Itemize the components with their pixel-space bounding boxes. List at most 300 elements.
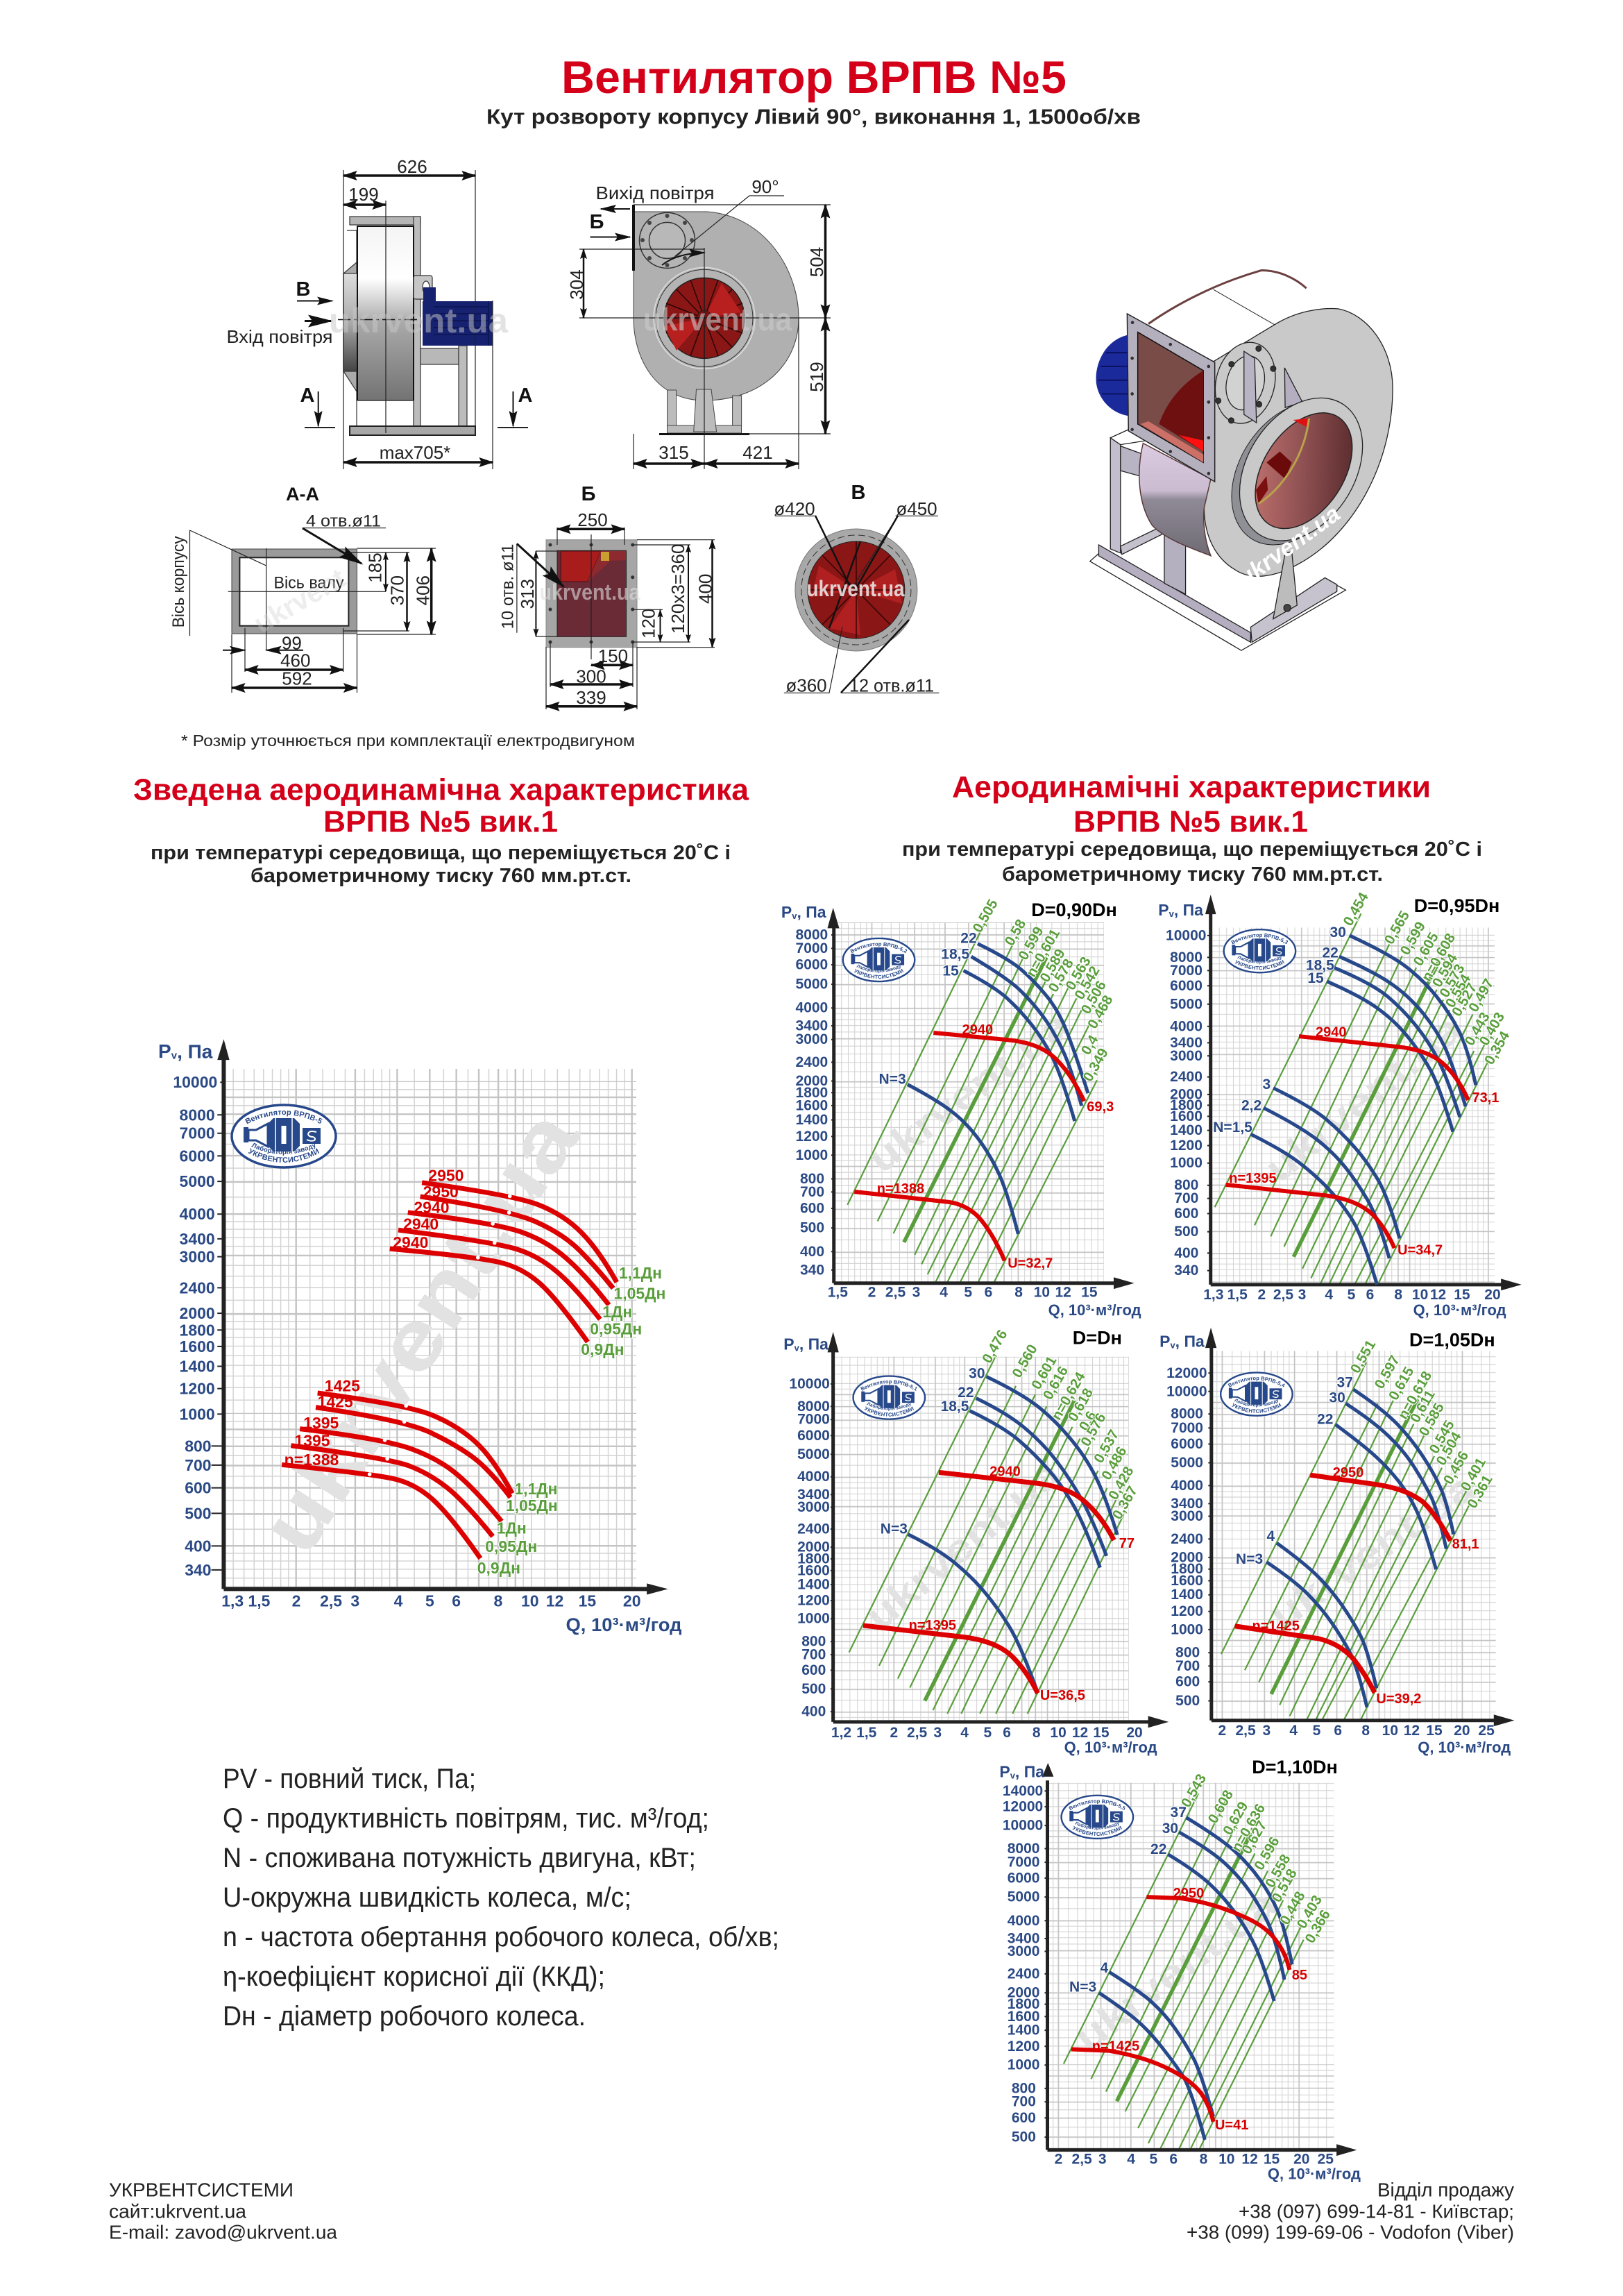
x axis labels: 12 xyxy=(546,1592,563,1610)
footer: sales contacts xyxy=(1187,2179,1514,2243)
dimensions front view: 304 xyxy=(566,269,587,300)
logo: Лабораторія заводу xyxy=(251,1142,315,1156)
axis titles and chart title: D=0,90Dн xyxy=(1031,900,1117,920)
drawing: section A-A: 370 xyxy=(387,575,408,605)
power and speed labels: 2940 xyxy=(1316,1025,1346,1040)
power and speed labels: N=3 xyxy=(879,1071,906,1087)
power and speed labels: U=39,2 xyxy=(1376,1691,1421,1707)
y axis labels: 340 xyxy=(185,1561,212,1579)
x axis labels: 2 xyxy=(890,1725,898,1741)
efficiency labels: 0,545 xyxy=(1426,1417,1458,1456)
power and speed labels: 37 xyxy=(1337,1375,1353,1391)
curves xyxy=(282,1183,617,1558)
x axis labels: 1,5 xyxy=(1227,1287,1248,1303)
efficiency labels: 0,476 xyxy=(979,1327,1011,1366)
dimensions front view: Вихід повітря xyxy=(595,183,715,203)
drawing: section B flange: Б xyxy=(581,483,595,505)
motor xyxy=(1096,335,1128,416)
y axis labels: 1800 xyxy=(1170,1097,1203,1113)
y axis labels: 3400 xyxy=(1171,1496,1203,1512)
x axis labels: 2,5 xyxy=(885,1285,906,1301)
logo: Вентилятор ВРПВ-5,1 xyxy=(860,1380,917,1391)
heading: characteristics xyxy=(902,770,1482,886)
y axis labels: 5000 xyxy=(1171,1455,1203,1471)
y axis labels: 4000 xyxy=(797,1469,830,1485)
chart: D=1,10Dн xyxy=(999,1757,1361,2183)
support bracket xyxy=(1273,552,1297,619)
x axis labels: 5 xyxy=(1313,1723,1321,1739)
peak efficiency line xyxy=(904,957,1046,1242)
y axis labels xyxy=(796,927,828,1278)
drawing: section A-A: 406 xyxy=(412,575,433,605)
diameter labels: 1,1Дн xyxy=(514,1480,558,1498)
y axis labels: 4000 xyxy=(796,1000,828,1016)
y axis labels: 10000 xyxy=(173,1073,217,1091)
efficiency lines xyxy=(1215,913,1488,1285)
dimensions side view: 626 xyxy=(397,156,427,177)
efficiency labels: 0,361 xyxy=(1464,1472,1496,1511)
x axis labels: 4 xyxy=(1289,1723,1298,1739)
chart: D=Dн xyxy=(783,1327,1169,1756)
dimensions front view: 315 xyxy=(658,442,689,463)
x axis labels: 2 xyxy=(1055,2152,1062,2168)
logo: Лабораторія заводу xyxy=(1234,1399,1278,1408)
x axis labels xyxy=(828,1285,1098,1301)
axis titles and chart title: D=Dн xyxy=(1073,1327,1122,1348)
legend: symbols xyxy=(223,1764,779,2032)
motor xyxy=(423,287,493,346)
footer: company contacts: УКРВЕНТСИСТЕМИ xyxy=(109,2179,294,2200)
x axis labels: 20 xyxy=(1484,1287,1501,1303)
logo: УКРВЕНТСИСТЕМИ xyxy=(1232,1403,1281,1413)
grid xyxy=(1211,927,1495,1285)
efficiency labels: 0,560 xyxy=(1009,1342,1041,1381)
efficiency labels: 0,403 xyxy=(1293,1893,1325,1932)
axis titles and chart title: D=1,05Dн xyxy=(1409,1329,1495,1350)
x axis labels: 3 xyxy=(350,1592,359,1610)
x axis labels: 12 xyxy=(1430,1287,1446,1303)
efficiency lines xyxy=(1064,1793,1304,2149)
x axis labels: 2,5 xyxy=(1072,2152,1092,2168)
y axis labels: 8000 xyxy=(180,1106,215,1124)
power and speed labels: U=36,5 xyxy=(1040,1688,1085,1703)
diameter labels: 1,05Дн xyxy=(506,1496,558,1514)
y axis labels: 1600 xyxy=(1170,1108,1203,1124)
power and speed labels: U=41 xyxy=(1215,2118,1248,2133)
y axis labels: 3000 xyxy=(180,1248,215,1266)
y axis labels: 600 xyxy=(801,1662,826,1678)
axis titles and chart title: P xyxy=(781,903,792,921)
x axis labels: 10 xyxy=(1412,1287,1428,1303)
x axis labels: 20 xyxy=(1126,1725,1143,1741)
axis titles and chart title: , Па xyxy=(1174,901,1203,919)
power and speed labels: n=1395 xyxy=(909,1618,956,1633)
axis titles: P xyxy=(999,1763,1010,1781)
watermark: ukrvent.ua xyxy=(241,1092,597,1569)
y axis labels: 2000 xyxy=(797,1539,830,1555)
axis titles and chart title xyxy=(783,1327,1157,1756)
power curves xyxy=(1266,1390,1454,1707)
y axis labels: 600 xyxy=(1175,1674,1200,1690)
y axis labels: 8000 xyxy=(797,1399,830,1415)
drawing: section B flange: 120х3=360 xyxy=(668,544,688,634)
y axis labels: 8000 xyxy=(796,927,828,943)
y axis labels: 1800 xyxy=(1008,1996,1039,2012)
frame xyxy=(232,549,357,634)
y axis labels: 10000 xyxy=(1166,1383,1207,1399)
y axis labels xyxy=(789,1376,830,1720)
efficiency labels: 0,615 xyxy=(1386,1364,1417,1403)
diameter labels: 0,95Дн xyxy=(485,1537,537,1555)
speed labels: 1395 xyxy=(294,1431,330,1449)
grid xyxy=(834,922,1104,1283)
efficiency labels xyxy=(1178,1771,1334,1946)
efficiency labels: 0,58 xyxy=(1001,917,1029,949)
y axis labels: 500 xyxy=(801,1681,826,1697)
y axis labels: 500 xyxy=(185,1504,212,1522)
y axis labels: 12000 xyxy=(1003,1799,1043,1815)
heading: summary characteristic: ВРПВ №5 вик.1 xyxy=(323,805,558,838)
y axis labels: 1400 xyxy=(796,1112,828,1128)
y axis labels: 5000 xyxy=(797,1446,830,1462)
x axis labels: 5 xyxy=(964,1285,972,1301)
logo: Лабораторія заводу xyxy=(867,1402,910,1411)
speed labels: 2950 xyxy=(423,1183,459,1201)
efficiency labels: 0,558 xyxy=(1262,1852,1294,1891)
efficiency labels xyxy=(979,1327,1141,1522)
lower scroll xyxy=(1139,444,1211,556)
axes xyxy=(1205,895,1522,1290)
drawing: section A-A: А-А xyxy=(286,484,319,505)
y axis labels: 800 xyxy=(1175,1645,1200,1661)
axis titles: v xyxy=(1010,1770,1016,1780)
watermark: ukrvent.ua xyxy=(857,1451,1070,1639)
speed curves xyxy=(854,1033,1084,1260)
efficiency labels: n=0,601 xyxy=(1023,927,1063,980)
legend: symbols: Dн - діаметр робочого колеса. xyxy=(223,2001,586,2032)
speed labels: 2950 xyxy=(428,1167,464,1185)
power and speed labels: 15 xyxy=(1307,970,1324,986)
power and speed labels: N=3 xyxy=(1069,1980,1096,1995)
power and speed labels: N=1,5 xyxy=(1213,1120,1252,1136)
y axis labels: 500 xyxy=(1175,1693,1200,1709)
grid xyxy=(1048,1783,1334,2150)
logo: Вентилятор ВРПВ-5,2 xyxy=(850,943,908,954)
efficiency labels xyxy=(1340,890,1513,1067)
best efficiency points xyxy=(368,1195,511,1476)
efficiency labels: 0,599 xyxy=(1397,919,1429,958)
power and speed labels: 2940 xyxy=(989,1464,1021,1480)
footer: sales contacts: Відділ продажу xyxy=(1377,2179,1514,2200)
x axis labels: 1,5 xyxy=(856,1725,877,1741)
y axis labels: 800 xyxy=(801,1634,826,1650)
y axis labels: 2400 xyxy=(180,1278,215,1297)
power and speed labels: 2,2 xyxy=(1241,1098,1261,1114)
axes xyxy=(827,908,1135,1289)
power and speed labels: 81,1 xyxy=(1452,1537,1479,1552)
x axis labels: 2,5 xyxy=(1235,1723,1256,1739)
y axis labels: 800 xyxy=(800,1171,824,1187)
dimensions front view xyxy=(566,176,831,469)
x axis labels: 12 xyxy=(1072,1725,1088,1741)
y axis labels xyxy=(1166,927,1206,1278)
x axis labels: 1,5 xyxy=(828,1285,848,1301)
diameter labels xyxy=(477,1264,665,1577)
power and speed labels: 18,5 xyxy=(1306,957,1334,973)
logo xyxy=(842,937,916,983)
x axis labels xyxy=(1055,2152,1334,2168)
power and speed labels: 18,5 xyxy=(941,1399,969,1415)
y axis labels: 400 xyxy=(801,1704,826,1720)
chart: D=1,05Dн xyxy=(1159,1327,1514,1756)
dimensions front view: 504 xyxy=(806,247,827,277)
y axis labels: 700 xyxy=(1012,2094,1036,2110)
efficiency labels: 0,454 xyxy=(1340,890,1372,929)
x axis labels: 2,5 xyxy=(907,1725,928,1741)
x axis labels: 20 xyxy=(1293,2152,1309,2168)
efficiency labels: 0,468 xyxy=(1085,993,1116,1031)
drawing: section B flange: 150 xyxy=(598,645,628,666)
y axis labels: 600 xyxy=(800,1200,824,1216)
power and speed labels: 2950 xyxy=(1173,1886,1204,1901)
power and speed labels: 30 xyxy=(1330,925,1346,940)
efficiency labels: n=0,636 xyxy=(1228,1801,1268,1855)
x axis labels: 12 xyxy=(1404,1723,1420,1739)
y axis labels xyxy=(1166,1365,1207,1709)
x axis labels: 3 xyxy=(912,1285,920,1301)
logo: Вентилятор ВРПВ-5,5 xyxy=(1069,1799,1125,1810)
flange and body of side view xyxy=(343,217,475,435)
x axis labels: 5 xyxy=(1348,1287,1356,1303)
peak efficiency line xyxy=(1293,961,1439,1257)
power and speed labels: 3 xyxy=(1263,1077,1271,1092)
logo: УКРВЕНТСИСТЕМИ xyxy=(1073,1825,1122,1837)
efficiency labels: 0,589 xyxy=(1037,946,1069,985)
axis titles and chart title: P xyxy=(1159,1332,1170,1350)
axis titles and chart title: v xyxy=(1170,1340,1175,1350)
y axis labels: 1400 xyxy=(1170,1122,1203,1138)
x axis labels: 8 xyxy=(1394,1287,1402,1303)
y axis labels: 1000 xyxy=(1171,1621,1203,1637)
x axis labels: 15 xyxy=(1454,1287,1470,1303)
efficiency labels: 0,599 xyxy=(1015,924,1047,963)
y axis labels: 1600 xyxy=(796,1097,828,1113)
y axis labels: 3400 xyxy=(180,1230,215,1248)
axis titles: Q, 10³·м³/год xyxy=(566,1614,681,1635)
y axis labels: 2400 xyxy=(796,1054,828,1070)
efficiency labels: 0,6 xyxy=(1076,1408,1100,1433)
logo: Лабораторія заводу xyxy=(856,965,901,973)
power and speed labels: n=1395 xyxy=(1229,1171,1277,1186)
drawing: view B inlet xyxy=(774,482,939,696)
power and speed labels: 77 xyxy=(1119,1536,1135,1551)
diameter labels: 1Дн xyxy=(497,1519,527,1537)
y axis labels: 1800 xyxy=(797,1551,830,1567)
efficiency labels: 0,601 xyxy=(1028,1353,1060,1392)
y axis labels: 2400 xyxy=(1170,1069,1203,1085)
axis titles and chart title: v xyxy=(1169,908,1175,918)
efficiency labels: 0,367 xyxy=(1110,1483,1141,1522)
dimensions front view: 421 xyxy=(742,442,773,463)
y axis labels: 1200 xyxy=(1171,1603,1203,1619)
drawing: section B flange: 10 отв. ø11 xyxy=(498,544,517,629)
y axis labels: 2000 xyxy=(1008,1985,1039,2001)
x axis labels: 6 xyxy=(1169,2152,1178,2168)
top sheet xyxy=(1148,271,1339,362)
y axis labels: 1400 xyxy=(797,1577,830,1593)
outlet flange xyxy=(640,212,695,268)
chart: D=0,90Dн xyxy=(781,897,1141,1319)
diameter labels: 0,9Дн xyxy=(477,1559,520,1577)
drawing: view B inlet: В xyxy=(851,482,865,504)
y axis labels: 7000 xyxy=(797,1412,830,1428)
axis titles and chart title: D=0,95Dн xyxy=(1414,895,1499,916)
y axis labels: 1000 xyxy=(180,1405,215,1423)
speed curves xyxy=(863,1472,1114,1694)
legend: symbols: PV - повний тиск, Па; xyxy=(223,1764,476,1794)
logo: Лабораторія заводу xyxy=(1075,1821,1119,1831)
logo xyxy=(852,1375,926,1420)
power and speed labels xyxy=(881,1366,1135,1703)
efficiency labels: 0,576 xyxy=(1078,1410,1110,1449)
x axis labels: 4 xyxy=(940,1285,948,1301)
y axis labels: 600 xyxy=(1012,2110,1036,2126)
logo xyxy=(230,1104,337,1169)
y axis labels: 600 xyxy=(185,1479,212,1497)
drawing: section A-A: 185 xyxy=(365,552,386,583)
y axis labels: 2000 xyxy=(1170,1086,1203,1102)
efficiency labels: 0,366 xyxy=(1302,1907,1334,1946)
y axis labels: 1400 xyxy=(1008,2023,1039,2038)
power and speed labels xyxy=(877,931,1114,1272)
drawing: section A-A xyxy=(169,484,436,693)
y axis labels: 3000 xyxy=(1171,1508,1203,1524)
y axis labels: 1200 xyxy=(797,1593,830,1609)
power and speed labels: n=1425 xyxy=(1092,2038,1139,2054)
subtitle: Кут розвороту корпусу Лівий 90°, виконання 1, 1500об/хв xyxy=(486,104,1141,129)
watermark: side view: ukrvent.ua xyxy=(329,301,509,340)
diameter labels: 0,95Дн xyxy=(590,1320,642,1338)
x axis labels: 15 xyxy=(1081,1285,1098,1301)
y axis labels: 6000 xyxy=(1171,1436,1203,1452)
diameter labels: 0,9Дн xyxy=(581,1340,624,1358)
y axis labels: 700 xyxy=(185,1456,212,1474)
power and speed labels: 2950 xyxy=(1333,1465,1363,1480)
dimensions side view: А xyxy=(518,385,533,407)
drawing: section A-A: 592 xyxy=(282,668,312,689)
y axis labels: 700 xyxy=(800,1184,824,1200)
peak efficiency line xyxy=(1271,1399,1418,1694)
efficiency labels: 0,349 xyxy=(1080,1045,1112,1084)
y axis labels: 5000 xyxy=(796,977,828,993)
housing xyxy=(1204,309,1393,576)
x axis labels: 20 xyxy=(1454,1723,1470,1739)
axis titles and chart title xyxy=(781,900,1141,1319)
axes xyxy=(828,1332,1169,1728)
footnote: * Розмір уточнюється при комплектації електродвигуном xyxy=(181,732,635,750)
y axis labels: 6000 xyxy=(1008,1870,1039,1886)
axis titles: , Па xyxy=(177,1040,213,1062)
housing xyxy=(634,212,799,400)
efficiency labels: 0,505 xyxy=(969,897,1001,936)
power and speed labels: 22 xyxy=(1317,1411,1333,1427)
axis titles xyxy=(158,1040,681,1635)
power and speed labels: 30 xyxy=(1329,1390,1345,1406)
drawing: view B inlet: 12 отв.ø11 xyxy=(849,675,934,696)
y axis labels: 3000 xyxy=(796,1031,828,1047)
axis titles: v xyxy=(171,1049,178,1061)
y axis labels: 700 xyxy=(1175,1658,1200,1674)
efficiency labels: n=0,618 xyxy=(1395,1369,1435,1422)
diameter labels: 1,05Дн xyxy=(613,1284,665,1302)
legend: symbols: η-коефіцієнт корисної дії (ККД); xyxy=(223,1961,605,1992)
efficiency labels xyxy=(969,897,1116,1084)
power and speed labels: 22 xyxy=(1150,1841,1166,1857)
x axis labels: 10 xyxy=(1382,1723,1398,1739)
power and speed labels xyxy=(1069,1805,1307,2133)
y axis labels: 4000 xyxy=(180,1205,215,1223)
watermark: ukrvent.ua xyxy=(1256,1006,1471,1192)
power and speed labels: 22 xyxy=(958,1385,974,1401)
efficiency labels: 0,486 xyxy=(1098,1444,1130,1483)
y axis labels: 800 xyxy=(1174,1177,1198,1193)
power and speed labels: 4 xyxy=(1266,1528,1275,1544)
y axis labels: 600 xyxy=(1174,1206,1198,1222)
y axis labels: 3400 xyxy=(1170,1035,1203,1051)
x axis labels: 10 xyxy=(521,1592,539,1610)
axis titles: Q, 10³·м³/год xyxy=(1268,2166,1361,2183)
y axis labels: 1000 xyxy=(796,1147,828,1163)
dimensions front view: Б xyxy=(590,211,604,233)
efficiency labels: 0,497 xyxy=(1465,976,1497,1015)
dimensions side view xyxy=(226,156,533,469)
axis titles and chart title xyxy=(1159,1329,1511,1756)
efficiency labels: 0,554 xyxy=(1443,971,1474,1011)
outlet flange xyxy=(1127,314,1215,482)
y axis labels: 6000 xyxy=(180,1147,215,1165)
footer: sales contacts: +38 (097) 699-14-81 - Київстар; xyxy=(1239,2200,1514,2222)
y axis labels: 3400 xyxy=(796,1018,828,1033)
y axis labels: 1200 xyxy=(1170,1138,1203,1154)
efficiency labels: 0,448 xyxy=(1277,1889,1309,1927)
y axis labels: 4000 xyxy=(1171,1478,1203,1494)
heading: characteristics: при температурі середовища, що переміщується 20˚С і xyxy=(902,838,1482,861)
dimensions front view: 90° xyxy=(751,176,779,197)
axes xyxy=(1205,1328,1514,1726)
y axis labels: 1800 xyxy=(796,1085,828,1101)
logo: Вентилятор ВРПВ-5,4 xyxy=(1228,1376,1285,1387)
y axis labels: 3400 xyxy=(1008,1930,1039,1946)
efficiency labels: 0,627 xyxy=(1239,1818,1271,1857)
drawing: view B inlet: ø420 xyxy=(774,498,815,519)
chart title: D=1,10Dн xyxy=(1252,1757,1338,1778)
power curves xyxy=(908,1376,1117,1693)
x axis labels: 6 xyxy=(1366,1287,1374,1303)
footer: company contacts: сайт:ukrvent.ua xyxy=(109,2200,246,2222)
y axis labels: 6000 xyxy=(797,1428,830,1444)
speed labels: 1425 xyxy=(325,1377,360,1395)
power and speed labels: 37 xyxy=(1171,1805,1187,1821)
power and speed labels xyxy=(1213,925,1499,1258)
y axis labels: 3400 xyxy=(797,1487,830,1503)
power and speed labels: 30 xyxy=(969,1366,985,1382)
speed labels: n=1388 xyxy=(284,1451,339,1469)
y axis labels xyxy=(1003,1783,1043,2145)
inlet flange xyxy=(1206,374,1388,569)
x axis labels: 8 xyxy=(493,1592,502,1610)
x axis labels: 6 xyxy=(1003,1725,1011,1741)
y axis labels: 3000 xyxy=(1170,1048,1203,1064)
